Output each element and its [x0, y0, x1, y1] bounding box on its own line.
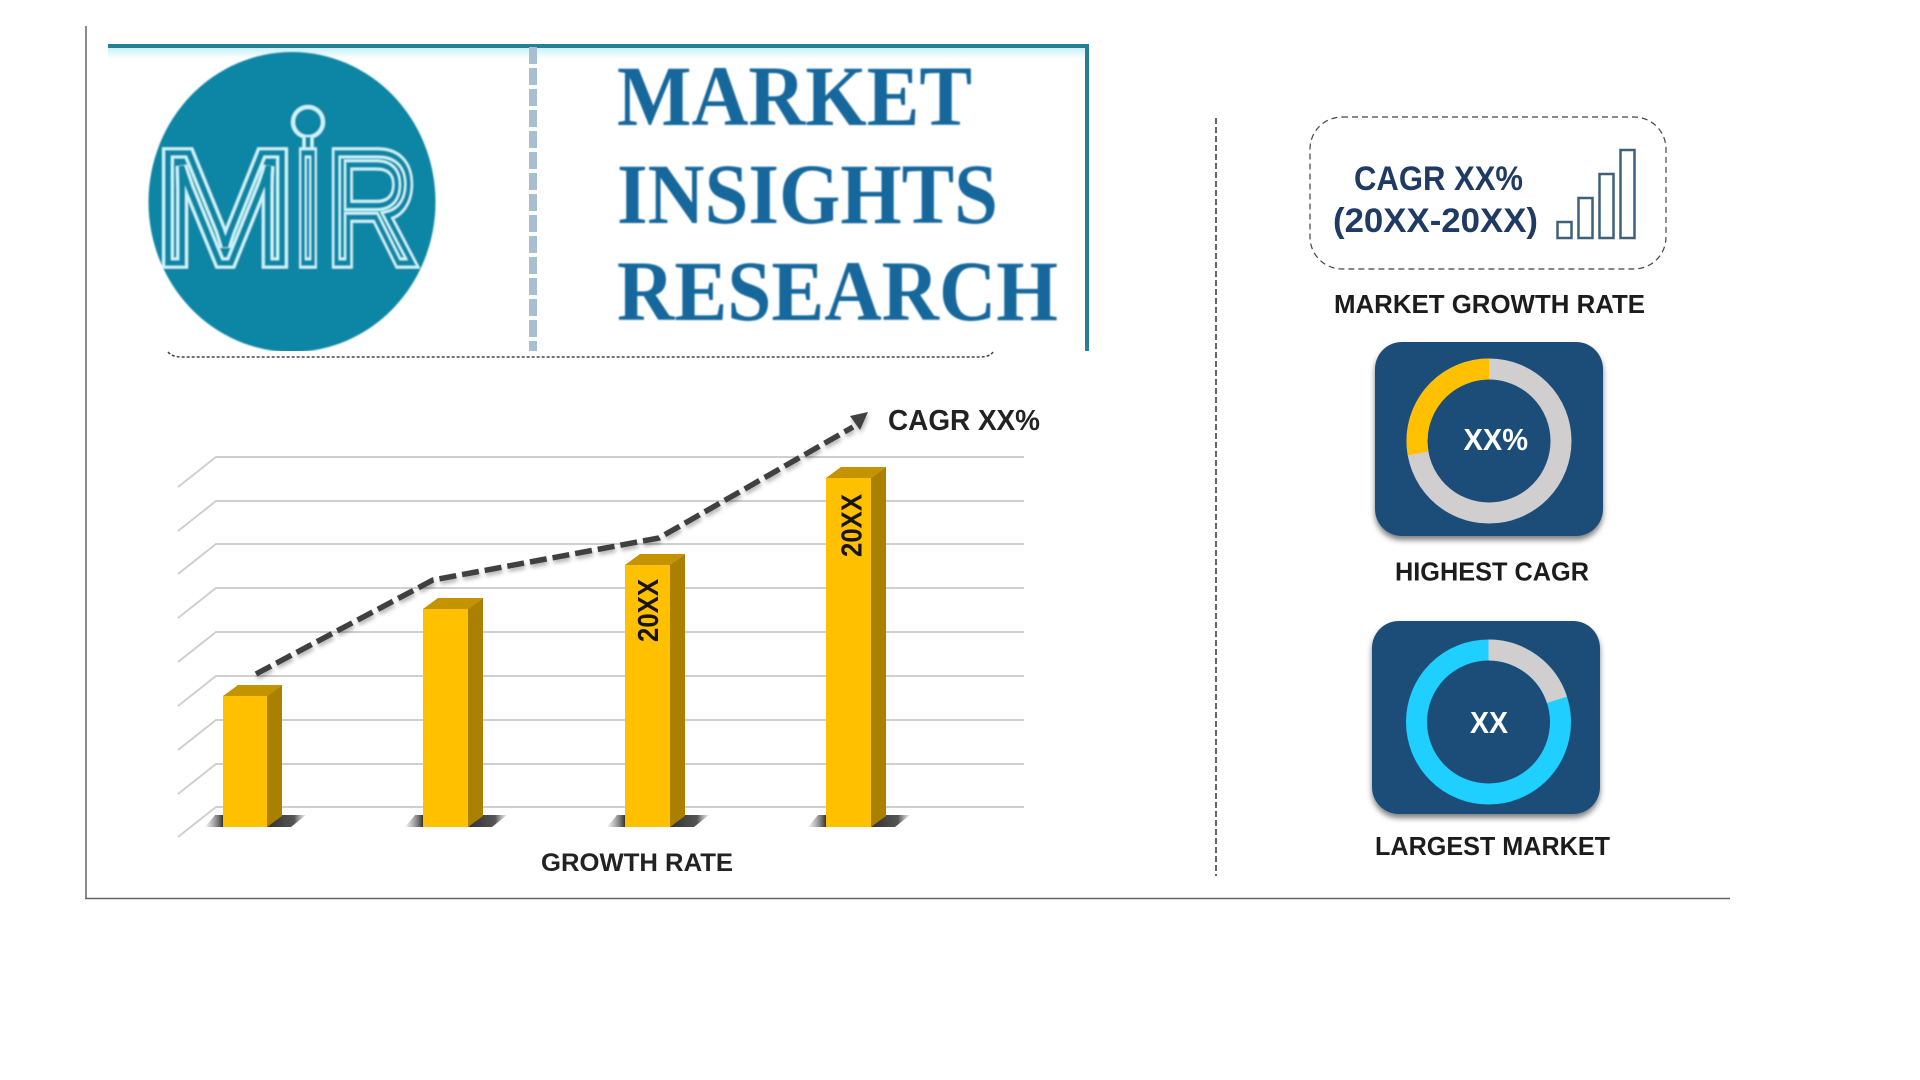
logo circle emblem — [148, 52, 436, 352]
trend arrow — [256, 412, 868, 674]
icon: rising bars — [1558, 150, 1634, 238]
chart caption: GROWTH RATE — [541, 849, 733, 877]
bar 4 — [808, 467, 910, 827]
vertical dashed divider — [1215, 118, 1217, 876]
logo wordmark: MARKET — [617, 48, 972, 144]
donut value: XX — [1470, 705, 1508, 740]
infographic canvas — [85, 26, 1730, 900]
donut: highest CAGR — [1417, 369, 1561, 513]
dashed CAGR box — [1310, 117, 1666, 269]
frame: left axis line — [85, 26, 87, 899]
CAGR text: CAGR XX% — [1354, 160, 1523, 198]
dashed panel edge under logo — [168, 352, 993, 357]
panel: highest CAGR — [1375, 342, 1603, 586]
logo wordmark — [617, 66, 1058, 322]
chart: growth bar chart — [178, 405, 1040, 877]
caption: highest CAGR: HIGHEST CAGR — [1395, 556, 1589, 586]
logo circle emblem: I — [293, 118, 323, 297]
CAGR period text: (20XX-20XX) — [1333, 202, 1538, 240]
card background — [1375, 342, 1603, 536]
panel: market growth rate — [1310, 117, 1666, 319]
logo circle emblem: M — [154, 118, 296, 297]
logo wordmark: RESEARCH — [617, 243, 1058, 339]
logo divider — [529, 47, 537, 351]
caption: market growth rate: MARKET GROWTH RATE — [1334, 289, 1645, 319]
panel: largest market — [1372, 621, 1610, 861]
bar 3 label: 20XX — [633, 578, 665, 642]
chart gridlines — [178, 457, 1024, 837]
card background — [1372, 621, 1600, 814]
logo circle emblem: R — [326, 118, 418, 297]
logo circle emblem: M — [154, 118, 296, 297]
bar 4 label: 20XX — [836, 493, 868, 557]
logo banner — [108, 43, 1089, 352]
bar 2 — [405, 598, 507, 827]
bar 3 — [607, 554, 709, 827]
frame: bottom axis line — [85, 898, 1730, 900]
donut value: XX% — [1464, 422, 1528, 457]
caption: largest market: LARGEST MARKET — [1375, 831, 1610, 861]
logo wordmark: INSIGHTS — [617, 146, 998, 242]
bar 1 — [205, 685, 306, 827]
logo circle emblem: R — [326, 118, 418, 297]
donut: largest market — [1416, 650, 1560, 794]
CAGR label: CAGR XX% — [888, 405, 1040, 437]
logo circle emblem: I — [293, 118, 323, 297]
